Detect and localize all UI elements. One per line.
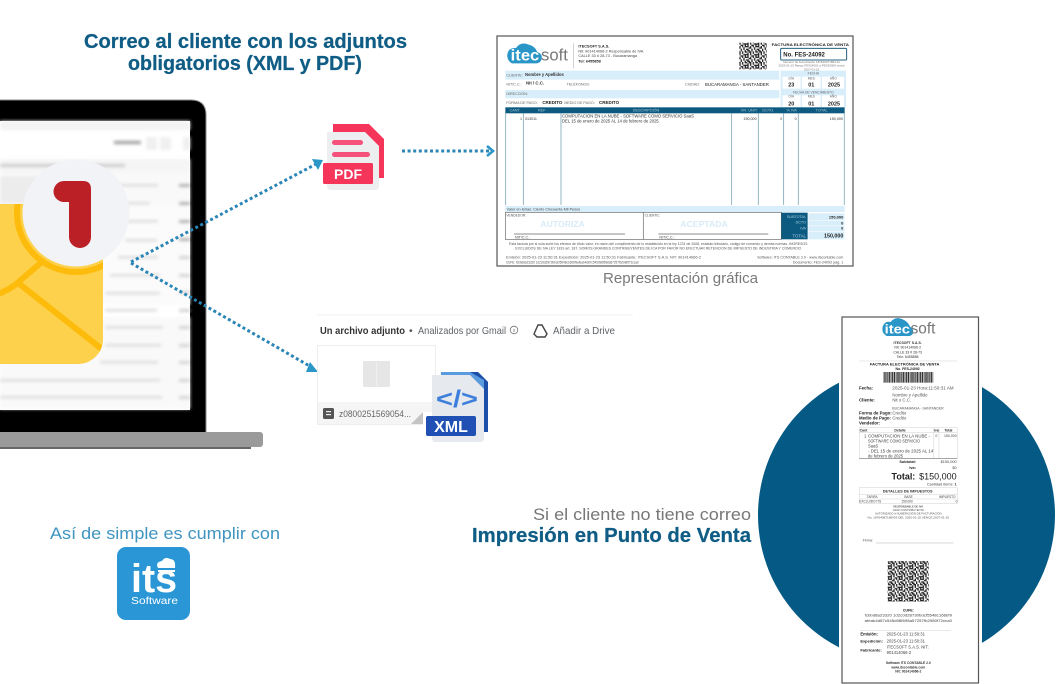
receipt issue dates: 901414066-2 <box>887 650 912 655</box>
receipt totals: Cantidad items: 1 <box>927 482 958 486</box>
receipt customer data: Vendedor: <box>859 421 881 426</box>
invoice customer data: CREDITO <box>599 100 620 105</box>
invoice totals <box>781 213 844 240</box>
invoice table: 0 <box>780 117 782 121</box>
invoice table: 150,000 <box>743 117 757 121</box>
invoice customer data: MEDIO DE PAGO: <box>564 101 595 105</box>
receipt items table: 0 <box>935 434 937 438</box>
icon: PDF file <box>323 124 384 190</box>
receipt issue dates: 2025-01-23 11:50:31 <box>887 638 926 643</box>
invoice totals: 0 <box>841 226 844 231</box>
invoice number box: Número de Autorización 187640071803 de <box>783 60 840 64</box>
invoice dates: DÍA <box>789 95 795 99</box>
receipt items table: Cant <box>860 428 868 432</box>
receipt items table: Iva <box>934 428 939 432</box>
receipt issuer: Telx: 6455858 <box>897 355 919 359</box>
receipt logo: soft <box>911 321 936 338</box>
blue circle behind receipt <box>758 366 1055 664</box>
icon: XML file <box>423 372 488 442</box>
invoice dates: MES <box>808 76 816 80</box>
receipt items table: SOFTWARE COMO SERVICIO <box>868 438 921 443</box>
attachment card: z0800251569054... <box>339 409 411 420</box>
receipt customer data: Fecha: <box>859 386 873 391</box>
callout: sin correo: Impresión en Punto de Venta <box>472 524 752 547</box>
receipt CUFE: fcbbd8a23320 1d2c0d28730bdcf5548c166bf9 <box>865 614 952 618</box>
receipt items table: Detalle <box>894 428 906 432</box>
receipt CUFE: CUFE: <box>903 609 914 613</box>
icon: yellow envelope <box>0 204 103 364</box>
signature boxes: NIT/C.C.: <box>515 235 530 239</box>
receipt customer data: Credito <box>892 411 907 416</box>
receipt footer: www.itscontable.com <box>890 665 925 669</box>
receipt items table: 150,000 <box>944 434 957 438</box>
invoice table: TOTAL <box>816 109 828 113</box>
receipt issue dates: Expedición: <box>860 638 883 643</box>
invoice totals: SUBTOTAL <box>787 215 806 219</box>
invoice customer data: CREDITO <box>542 100 563 105</box>
receipt fiscal notes <box>867 505 950 519</box>
receipt totals: Iva: <box>909 466 916 470</box>
receipt tax table: 150.000 <box>901 500 913 504</box>
invoice table: 0 <box>795 117 797 121</box>
signature boxes: VENDEDOR: <box>506 214 526 218</box>
receipt barcode <box>883 372 933 383</box>
invoice table: % IVA <box>786 109 797 113</box>
invoice dates: FECHA <box>808 72 820 76</box>
attachment header: Añadir a Drive <box>553 325 615 337</box>
receipt totals: Subtotal: <box>899 460 916 464</box>
invoice dates: 01 <box>808 101 814 107</box>
invoice table: CANT. <box>509 109 521 113</box>
invoice customer data: BUCARAMANGA - SANTANDER <box>705 82 769 87</box>
invoice table: DCTO. <box>762 109 774 113</box>
invoice legal notes: Documento: FES-24092 pág. 1 <box>793 261 843 265</box>
invoice dates: 23 <box>788 82 794 88</box>
receipt issue dates: Emisión: <box>860 631 878 636</box>
invoice dates: AÑO <box>830 75 837 80</box>
invoice customer data: CIUDAD: <box>685 83 700 87</box>
invoice table: COMPUTACION EN LA NUBE - SOFTWARE COMO SERVICIO SaaS <box>562 113 694 118</box>
invoice dates: 2025 <box>828 82 840 88</box>
invoice table: REF <box>538 109 546 113</box>
invoice number box: No. FES-24092 <box>783 52 826 58</box>
invoice table <box>505 107 845 205</box>
tagline: así de simple: Así de simple es cumplir con <box>50 525 280 543</box>
receipt customer data: BUCARAMANGA - SANTANDER <box>892 406 944 410</box>
invoice table: DEL 15 de enero de 2025 AL 14 de febrero de 2025 <box>562 118 659 123</box>
invoice table: 150,000 <box>830 117 843 121</box>
invoice customer data: DIRECCIÓN: <box>506 91 528 96</box>
invoice totals: 150,000 <box>824 234 843 240</box>
logo: ITS Software: Software <box>131 596 179 607</box>
invoice legal notes: Software: ITS CONTABLE 2.0 - www.itscontable.com <box>757 255 843 259</box>
signature boxes: ACEPTADA <box>680 219 728 229</box>
receipt footer: Software ITS CONTABLE 2.0 <box>886 661 931 665</box>
caption: representación gráfica: Representación gráfica <box>603 271 759 287</box>
invoice customer data: Nombre y Apellidos <box>525 72 565 77</box>
receipt tax table: TARIFA <box>867 495 878 499</box>
callout: sin correo <box>472 505 752 547</box>
invoice dates: 20 <box>788 101 794 107</box>
receipt customer data: 2025-01-23 Hora:11:50:31 AM <box>892 386 954 391</box>
laptop body <box>0 100 263 449</box>
icon: XML file: XML <box>434 419 468 436</box>
receipt customer data: Nit o C.C. <box>892 398 911 403</box>
receipt issuer: No. FES-24092 <box>896 367 920 371</box>
receipt fiscal notes: GRAN CONTRIBUYENTE <box>893 508 924 512</box>
receipt customer data: Forma de Pago: <box>859 411 892 416</box>
receipt issue dates: ITECSOFT S.A.S. NIT: <box>887 645 929 650</box>
callout: sin correo: Si el cliente no tiene correo <box>533 505 751 524</box>
receipt tax table <box>859 488 958 504</box>
invoice number box: 2025-01-15 Rango FES24001 a FES30000 vence <box>779 63 845 67</box>
laptop with mail notification <box>0 100 263 449</box>
invoice customer data: NIT/C.C.: <box>506 82 522 86</box>
receipt items table: COMPUTACION EN LA NUBE - <box>868 433 931 438</box>
receipt customer data: Cliente: <box>859 398 875 403</box>
invoice table: 1 <box>520 117 522 121</box>
invoice dates: 01 <box>808 82 814 88</box>
receipt tax table: 0 <box>956 500 958 504</box>
receipt tax table: EXCLUIDO ITS <box>859 500 881 504</box>
attachment header <box>320 325 615 337</box>
receipt footer <box>886 661 931 674</box>
invoice upper section <box>505 42 849 205</box>
invoice customer data: Nit / C.C. <box>526 81 544 86</box>
arrow: mail to XML <box>131 263 318 372</box>
invoice customer data: FORMA DE PAGO: <box>506 101 538 105</box>
attachment header: Analizados por Gmail <box>418 325 506 337</box>
receipt issue dates <box>860 631 929 655</box>
invoice totals: TOTAL <box>792 233 807 238</box>
invoice table: VR. UNIT. <box>741 109 758 113</box>
icon: notification badge 1 <box>22 160 130 266</box>
invoice customer data <box>505 71 779 105</box>
invoice dates: AÑO <box>830 94 837 99</box>
receipt items table: 1 <box>864 433 867 438</box>
receipt totals <box>892 460 958 486</box>
receipt logo <box>882 318 936 338</box>
invoice dates: DÍA <box>789 76 795 80</box>
icon: PDF file: PDF <box>334 166 362 182</box>
invoice number box <box>772 42 849 71</box>
icon: XML file: </> <box>436 386 478 413</box>
invoice number box: FACTURA ELECTRÓNICA DE VENTA <box>772 42 849 47</box>
POS receipt <box>839 314 982 684</box>
title: Correo al cliente con los adjuntos <box>84 31 407 53</box>
receipt issue dates: Fabricante: <box>860 648 882 653</box>
receipt footer: Nit: 901414066-2 <box>895 670 922 674</box>
invoice totals: 150,000 <box>829 214 844 219</box>
invoice legal notes: CUFE: fcbbd8a23320 1d2c0d28730bdcf5548c166bf9afeab4d87c545d98f698a57257fb2980f72cca0 <box>506 261 639 265</box>
arrow: PDF to invoice <box>402 146 493 156</box>
receipt items table <box>859 428 957 459</box>
invoice table: DESCRIPCIÓN <box>633 108 660 113</box>
attachment header: Un archivo adjunto <box>320 325 405 337</box>
receipt signature <box>863 539 953 543</box>
logo: ITS Software <box>117 547 190 620</box>
invoice legal notes: Emisión: 2025-01-23 11:50:31 Expedición: 2025-01-23 11:50:31 Fabricante: ITECSOFT S.A.S. NIT: 901414066-2 <box>506 255 701 259</box>
amount in words <box>505 206 845 212</box>
receipt items table: - DEL 15 de enero de 2025 AL 14 <box>868 448 934 453</box>
amount in words: Valor en letras: Ciento Cincuenta Mil Pesos <box>507 207 580 211</box>
invoice logo: soft <box>541 46 568 65</box>
attachment header: • <box>409 325 413 337</box>
signature boxes: AUTORIZA <box>540 219 586 229</box>
invoice legal notes <box>506 242 843 265</box>
receipt totals: Total: <box>892 471 915 481</box>
arrow: mail to PDF <box>131 159 323 262</box>
invoice legal notes: EXCLUIDOS DE IVA LEY 1819 art. 187. SOMOS GRANDES CONTRIBUYENTES DE ICA POR FAVOR NO EFECTUAR RETENCION DE IMPUESTO DE INDUSTRIA Y COMERCIO <box>515 247 802 251</box>
receipt customer data <box>859 386 954 426</box>
invoice issuer data: CALLE 33 # 28-73 - Bucaramanga <box>578 54 638 58</box>
invoice dates <box>781 71 846 107</box>
receipt customer data: Credito <box>892 416 907 421</box>
receipt issuer: CALLE 33 # 28-73 <box>893 350 922 354</box>
receipt issuer: ITECSOFT S.A.S. <box>894 341 922 345</box>
receipt fiscal notes: AUTORIZADO A NUMERACIÓN DE FACTURACIÓN <box>875 511 942 516</box>
receipt issuer: Nit: 901414066-2 <box>894 346 921 350</box>
receipt items table: de febrero de 2025 <box>868 453 904 458</box>
receipt totals: $0 <box>952 466 957 470</box>
invoice logo: itec <box>511 48 540 65</box>
invoice table: 013011 <box>525 117 537 121</box>
receipt tax table: DETALLES DE IMPUESTOS <box>883 489 933 493</box>
receipt logo: itec <box>885 322 911 337</box>
receipt customer data: Medio de Pago: <box>859 416 892 421</box>
invoice totals: IVA <box>800 226 807 230</box>
signature boxes: CLIENTE: <box>645 214 660 218</box>
invoice dates: FECHA DE VENCIMIENTO <box>793 90 834 94</box>
receipt fiscal notes: No. 18764087180933 DEL 2025-01-15 VENCE 2027-01-15 <box>867 515 950 519</box>
invoice issuer data: Tel: 6455858 <box>578 59 602 63</box>
receipt totals: $150,000 <box>919 471 957 481</box>
invoice logo <box>507 44 568 65</box>
receipt totals: $150,000 <box>941 460 957 464</box>
title: obligatorios (XML y PDF) <box>128 53 362 75</box>
signature boxes: NIT/C.C.: <box>659 235 675 239</box>
invoice dates: 2025 <box>828 101 840 107</box>
invoice QR code <box>739 43 767 69</box>
receipt CUFE <box>865 609 952 623</box>
laptop screen: blurred inbox <box>0 121 190 410</box>
signature boxes <box>505 212 781 239</box>
invoice: representación gráfica <box>497 36 853 266</box>
invoice legal notes: Esta factura por si sola surte los efectos de título valor, en razón del cumplimiento de lo establecido en la ley 1231 de 2008, estatuto tributario, código de comercio y demás normas. INGRESOS <box>509 242 808 246</box>
Gmail attachment panel <box>317 315 633 424</box>
receipt customer data: Nombre y Apellido <box>892 393 928 398</box>
invoice issuer data <box>578 44 644 63</box>
invoice totals: DCTO <box>796 221 806 225</box>
receipt fiscal notes: RESPONSABLE DE IVA <box>894 505 923 509</box>
receipt signature: Firma: <box>863 539 873 543</box>
invoice issuer data: ITECSOFT S.A.S. <box>578 44 609 48</box>
receipt issue dates: 2025-01-23 11:50:31 <box>887 631 926 636</box>
receipt items table: SaaS <box>868 443 878 448</box>
invoice totals: 0 <box>841 220 844 225</box>
receipt QR code <box>888 561 929 602</box>
attachment card <box>318 346 436 424</box>
logo: ITS Software: its <box>131 557 177 601</box>
invoice customer data: CLIENTE: <box>506 73 523 77</box>
invoice number box: 2027-01-15 <box>804 67 820 71</box>
receipt tax table: IMPUESTO <box>939 495 956 499</box>
receipt issuer <box>859 341 957 371</box>
receipt tax table: BASE <box>904 495 913 499</box>
invoice dates: MES <box>808 95 816 99</box>
receipt items table: Total <box>944 428 952 432</box>
title <box>84 31 407 75</box>
invoice customer data: TELÉFONOS: <box>567 82 590 87</box>
receipt issuer: FACTURA ELECTRÓNICA DE VENTA <box>870 361 940 366</box>
invoice issuer data: Nit: 901414066-2 Responsable de IVA <box>578 49 644 53</box>
invoice lower section <box>505 206 845 265</box>
receipt CUFE: afeab4d87c545d98f698a57257fb2980f72cca0 <box>865 619 952 623</box>
